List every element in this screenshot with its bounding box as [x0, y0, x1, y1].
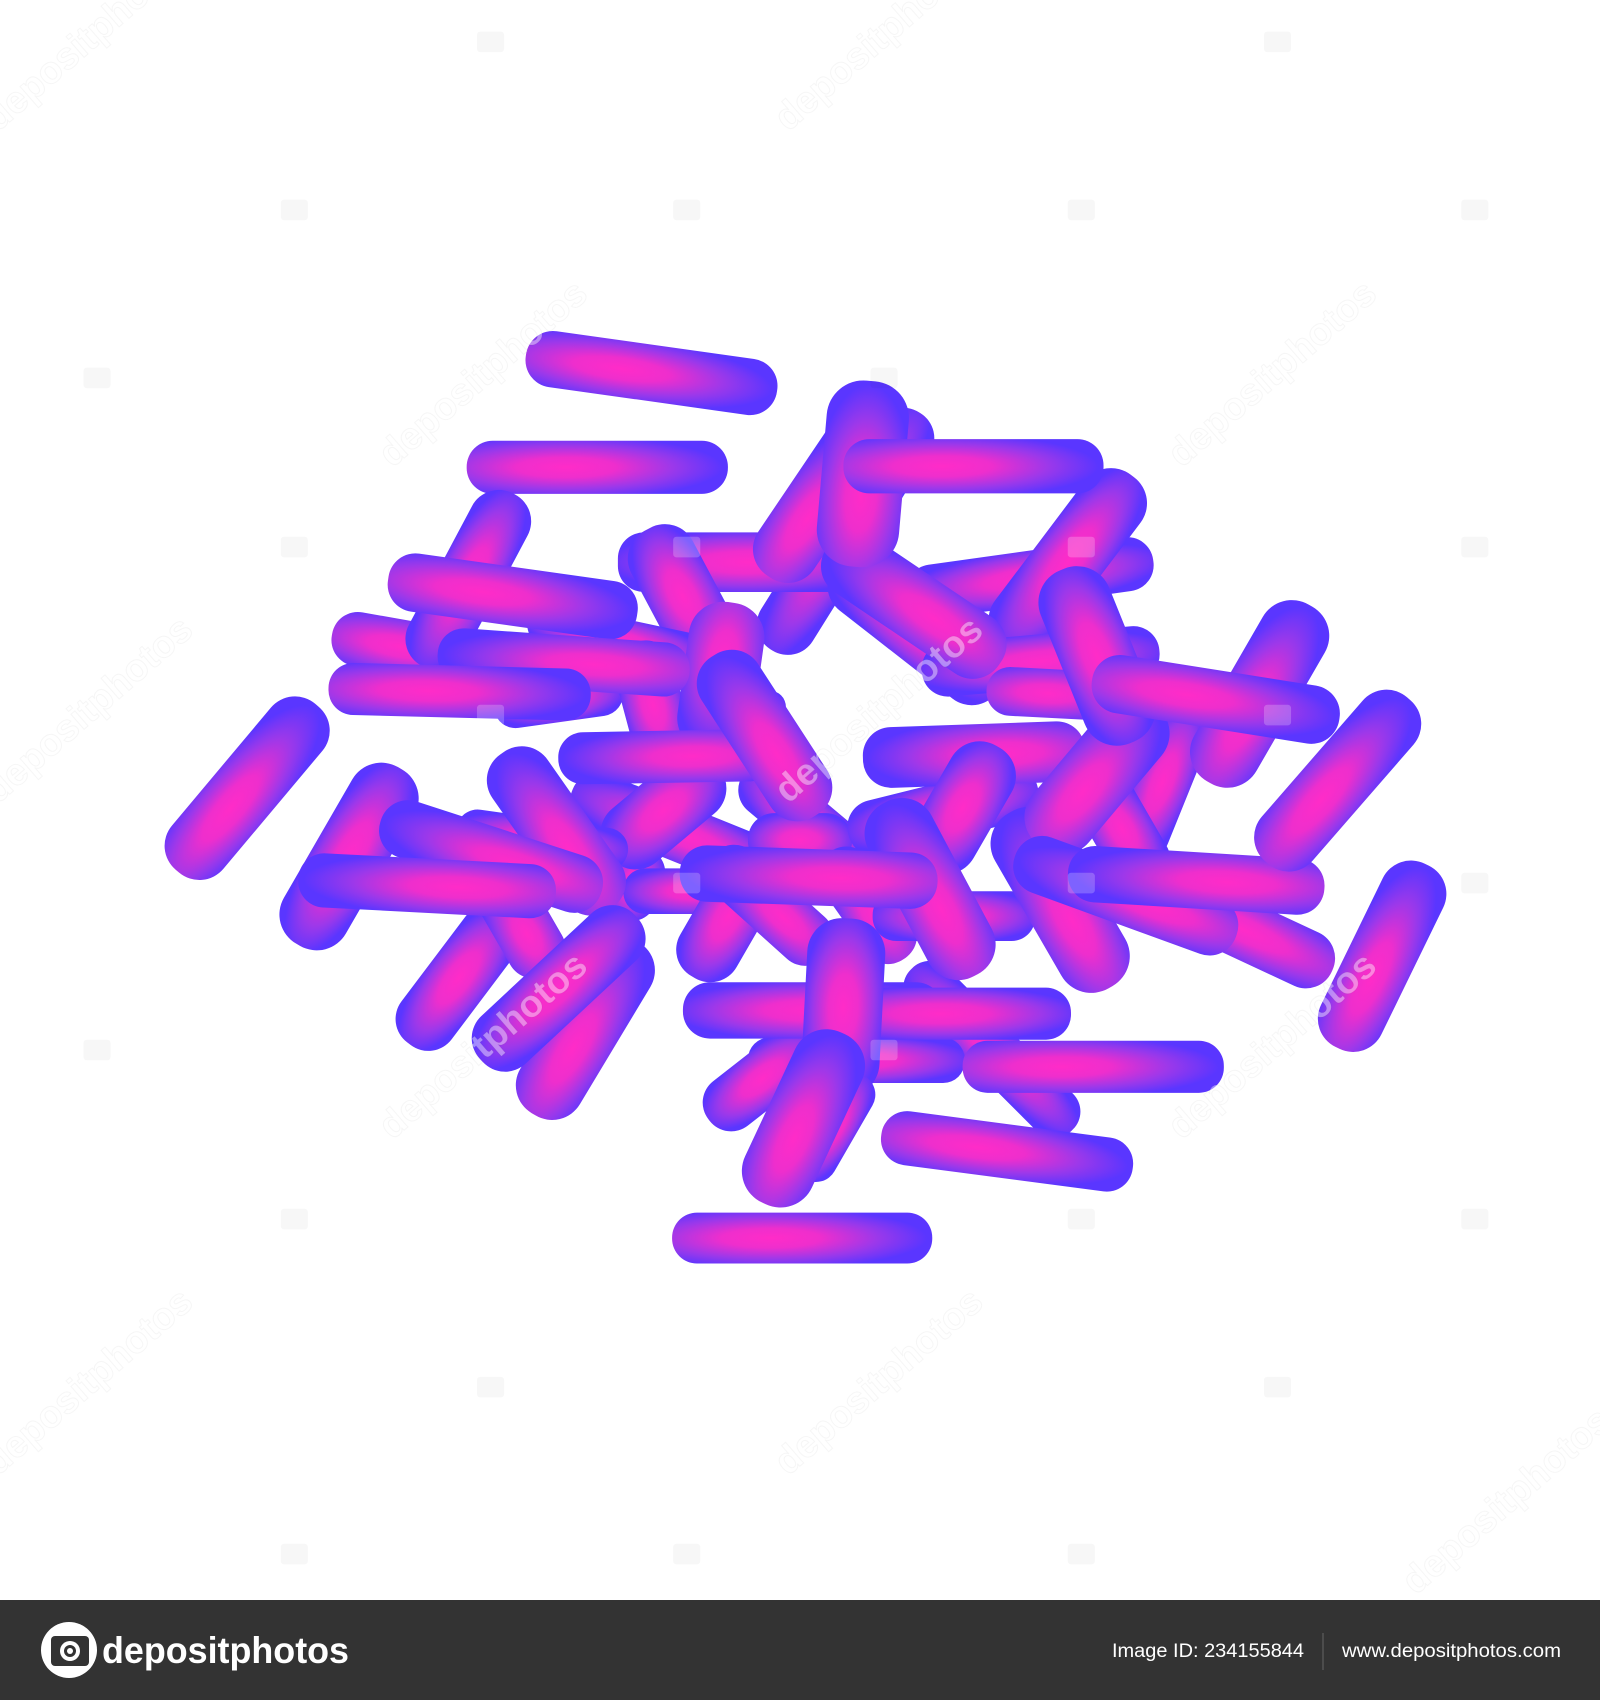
rod [267, 750, 431, 963]
rod [692, 1014, 833, 1142]
rod [558, 729, 776, 785]
rod: second isolated [467, 441, 728, 494]
rod [327, 608, 518, 693]
rod [464, 855, 575, 988]
rod [562, 764, 804, 906]
rod [978, 794, 1142, 1006]
rod [587, 739, 740, 883]
rod [384, 893, 533, 1063]
rod [809, 519, 1019, 691]
rod [878, 1108, 1136, 1195]
watermark text: depositphotos [371, 944, 596, 1147]
rod [474, 734, 638, 928]
bacteria cluster [152, 327, 1457, 1264]
rod [395, 479, 542, 681]
watermark text: depositphotos [1160, 272, 1385, 475]
rod [608, 634, 699, 775]
watermark camera icons on rods [477, 537, 1291, 1060]
rod [673, 597, 769, 758]
rod [1005, 828, 1246, 963]
rod: tall vertical [814, 377, 912, 570]
rod [694, 834, 845, 977]
rod [842, 760, 1045, 862]
watermark text: depositphotos [766, 1280, 991, 1483]
rod [491, 668, 626, 731]
rod [453, 807, 631, 874]
rod [862, 720, 1086, 789]
rod [741, 407, 898, 595]
rod [523, 599, 713, 680]
rod: bottom isolated [672, 1213, 932, 1264]
website: www.depositphotos.com [1341, 1641, 1561, 1662]
rod: top isolated [522, 327, 781, 419]
rod [152, 684, 343, 893]
rod [893, 951, 1091, 1148]
rod [853, 786, 1007, 992]
rod [730, 1018, 877, 1219]
logo wordmark: depositphotos [102, 1630, 349, 1671]
footer bar [0, 1600, 1600, 1700]
rod [815, 540, 1017, 718]
rod [328, 662, 591, 721]
rod [384, 550, 641, 643]
rod [596, 839, 673, 929]
rod [710, 691, 786, 723]
rod [963, 1041, 1224, 1093]
rod [1010, 682, 1184, 869]
rod: center front [679, 844, 939, 910]
rod [746, 397, 945, 666]
rod [786, 1065, 883, 1190]
rod [1307, 850, 1457, 1063]
watermark camera icons on white [83, 32, 1488, 1564]
rod [504, 923, 667, 1132]
icon: camera logo [41, 1622, 97, 1678]
rod [617, 513, 749, 680]
rod [1084, 835, 1344, 998]
rod [807, 836, 928, 975]
rod [920, 624, 1162, 699]
rod [1066, 844, 1326, 916]
watermark text: depositphotos [1160, 944, 1385, 1147]
rod [372, 793, 610, 920]
rod [748, 813, 852, 867]
rod [1028, 556, 1166, 756]
rod [1105, 697, 1219, 869]
rod [1178, 588, 1342, 800]
rod [685, 638, 844, 833]
rod [1063, 758, 1181, 901]
rod [727, 750, 888, 898]
watermark text: depositphotos [371, 272, 596, 475]
rod [873, 891, 1035, 941]
watermark text: depositphotos [766, 608, 991, 811]
rod [975, 455, 1160, 668]
rod [903, 534, 1157, 622]
rod [800, 916, 887, 1099]
rod [665, 839, 792, 993]
rod: top right horizontal [843, 439, 1104, 493]
rod [811, 988, 1071, 1040]
rod [683, 982, 943, 1039]
rod [618, 532, 878, 592]
rod [436, 627, 692, 698]
rod [897, 729, 1028, 886]
rod [459, 893, 658, 1084]
rod [748, 1038, 965, 1083]
rod [1087, 651, 1344, 748]
rod [985, 666, 1150, 723]
image id: Image ID: 234155844 [1112, 1641, 1304, 1662]
rod [623, 868, 764, 914]
rod [297, 852, 557, 920]
rod [1241, 677, 1434, 884]
